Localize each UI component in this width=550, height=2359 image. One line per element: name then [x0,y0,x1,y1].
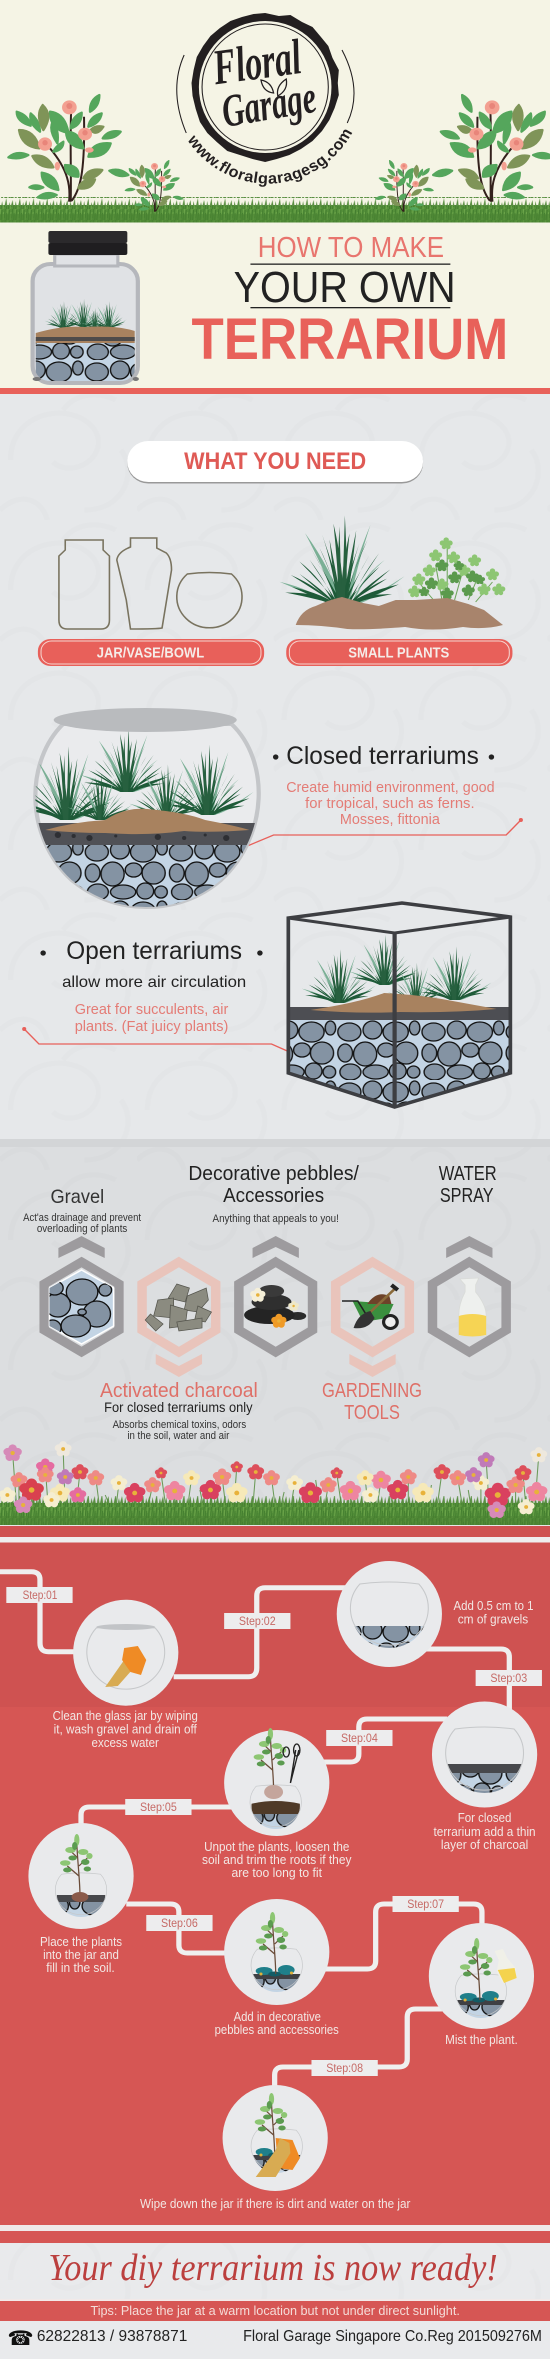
tips bar: Tips: Place the jar at a warm location but not under direct sunlight. [90,2303,460,2318]
text: activated charcoal [100,1379,258,1442]
panel: what you need background [0,394,550,1139]
title: TERRARIUM [192,306,508,372]
label: small plants [286,639,512,666]
step labels: Step:04 [341,1731,378,1745]
heading: what you need pill: WHAT YOU NEED [184,449,366,475]
text: closed terrariums: Create humid environment, good [286,780,495,796]
icon: jar, vase, bowl outlines [59,538,242,629]
text: closed terrariums: Mosses, fittonia [340,812,441,828]
step 1: clean jar [53,1600,198,1750]
title [192,232,508,372]
step 2: gravel: cm of gravels [458,1612,529,1626]
icon: open cube terrarium [288,903,510,1107]
text: closed terrariums: Closed terrariums [286,743,479,770]
logo: Floral Garage badge: www.floralgaragesg.com [188,130,352,187]
step labels: Step:02 [239,1614,276,1628]
footer contact [0,2321,550,2359]
hexagon: gravel [44,1236,119,1352]
step 2: gravel: Add 0.5 cm to 1 [454,1598,534,1613]
text: open terrariums: allow more air circulation [62,974,246,991]
steps connector lines [0,1572,509,2090]
step 6: decorative pebbles: Add in decorative [234,2009,321,2024]
text: decorative pebbles: Anything that appeals to you! [213,1213,339,1225]
panel: materials background [0,1139,550,1525]
hexagon: gardening tools [336,1262,409,1377]
step labels: Step:06 [161,1916,198,1930]
icon: bushes left [8,95,183,212]
text: decorative pebbles: Decorative pebbles/ [188,1162,359,1185]
step 7: mist [429,1923,534,2047]
footer contact: 62822813 / 93878871 [37,2327,187,2345]
text: activated charcoal: Absorbs chemical toxins, odors [113,1419,247,1431]
step 5: place plants: fill in the soil. [46,1960,115,1975]
text: closed terrariums [273,743,495,828]
step 6: decorative pebbles: pebbles and accessories [215,2022,339,2037]
icon: closed terrarium bowl [18,708,263,910]
step 4: unpot plants: Unpot the plants, loosen the [204,1839,349,1854]
step 7: mist: Mist the plant. [445,2032,518,2047]
step 4: unpot plants [202,1728,352,1880]
text: gardening tools: GARDENING [322,1379,422,1402]
logo: Floral Garage badge: Garage [218,72,320,138]
hexagon: water spray [432,1236,506,1352]
label: jar/vase/bowl [38,639,264,666]
step 3: charcoal [432,1702,537,1852]
step labels: Step:08 [326,2061,363,2075]
text: water spray [439,1162,497,1207]
heading: what you need pill [127,441,423,484]
step 3: charcoal: terrarium add a thin [434,1824,536,1839]
step 8: wipe down: Wipe down the jar if there is dirt and water on the jar [140,2196,411,2211]
logo: Floral Garage badge: Floral [209,29,305,96]
text: open terrariums [40,938,263,1035]
step 1: clean jar: it, wash gravel and drain off [54,1722,197,1736]
step labels: Step:05 [140,1800,177,1814]
step labels: Step:03 [490,1671,527,1685]
tips bar [0,2299,550,2321]
label: jar/vase/bowl: JAR/VASE/BOWL [97,645,204,661]
text: gravel: overloading of plants [37,1223,128,1235]
hexagon: charcoal [142,1262,216,1377]
logo: Floral Garage badge [176,13,355,187]
step labels: Step:01 [23,1588,57,1602]
step 5: place plants: Place the plants [40,1934,122,1949]
icon: bushes right [376,95,550,212]
step 4: unpot plants: soil and trim the roots if they [202,1852,352,1867]
icon: small plants on soil [279,516,505,630]
hexagon: pebbles [239,1236,313,1352]
text: decorative pebbles [188,1162,359,1225]
step 5: place plants [28,1823,134,1975]
title: YOUR OWN [234,262,456,312]
step 5: place plants: into the jar and [43,1947,119,1962]
text: gravel: Act'as drainage and prevent [23,1212,142,1224]
callout line: open [23,1028,287,1051]
text: open terrariums: plants. (Fat juicy plants) [75,1019,228,1035]
step 4: unpot plants: are too long to fit [232,1865,322,1880]
step 1: clean jar: Clean the glass jar by wiping [53,1708,198,1723]
flower meadow strip [0,1441,550,1525]
label: small plants: SMALL PLANTS [348,645,449,661]
text: water spray: SPRAY [440,1184,494,1207]
callout line: closed [247,819,522,846]
text: gardening tools: TOOLS [344,1401,400,1424]
step 1: clean jar: excess water [92,1735,159,1750]
text: activated charcoal: in the soil, water and air [127,1430,230,1442]
panel: steps background [0,1525,550,2243]
text: water spray: WATER [439,1162,497,1185]
text: decorative pebbles: Accessories [223,1184,324,1207]
text: open terrariums: Open terrariums [66,938,242,965]
text: activated charcoal: For closed terrariums only [104,1400,253,1416]
step 2: gravel [337,1561,534,1667]
step 8: wipe down [140,2085,411,2211]
step 6: decorative pebbles [215,1899,339,2037]
step 3: charcoal: layer of charcoal [441,1837,528,1852]
text: closed terrariums: for tropical, such as ferns. [305,796,475,812]
text: activated charcoal: Activated charcoal [100,1379,258,1402]
text: gravel [23,1186,142,1235]
title: HOW TO MAKE [258,232,444,264]
panel: cream header background [0,0,550,389]
panel: ready banner [0,2243,550,2299]
text: gravel: Gravel [51,1186,104,1208]
footer contact: ☎ [7,2326,34,2350]
step 3: charcoal: For closed [458,1810,511,1825]
divider red [0,388,550,394]
step labels: Step:07 [407,1897,444,1911]
grass strip top [0,197,550,222]
text: gardening tools [322,1379,422,1424]
icon: jar with plants [33,231,139,383]
step labels [6,1587,542,2076]
text: open terrariums: Great for succulents, air [75,1002,228,1018]
